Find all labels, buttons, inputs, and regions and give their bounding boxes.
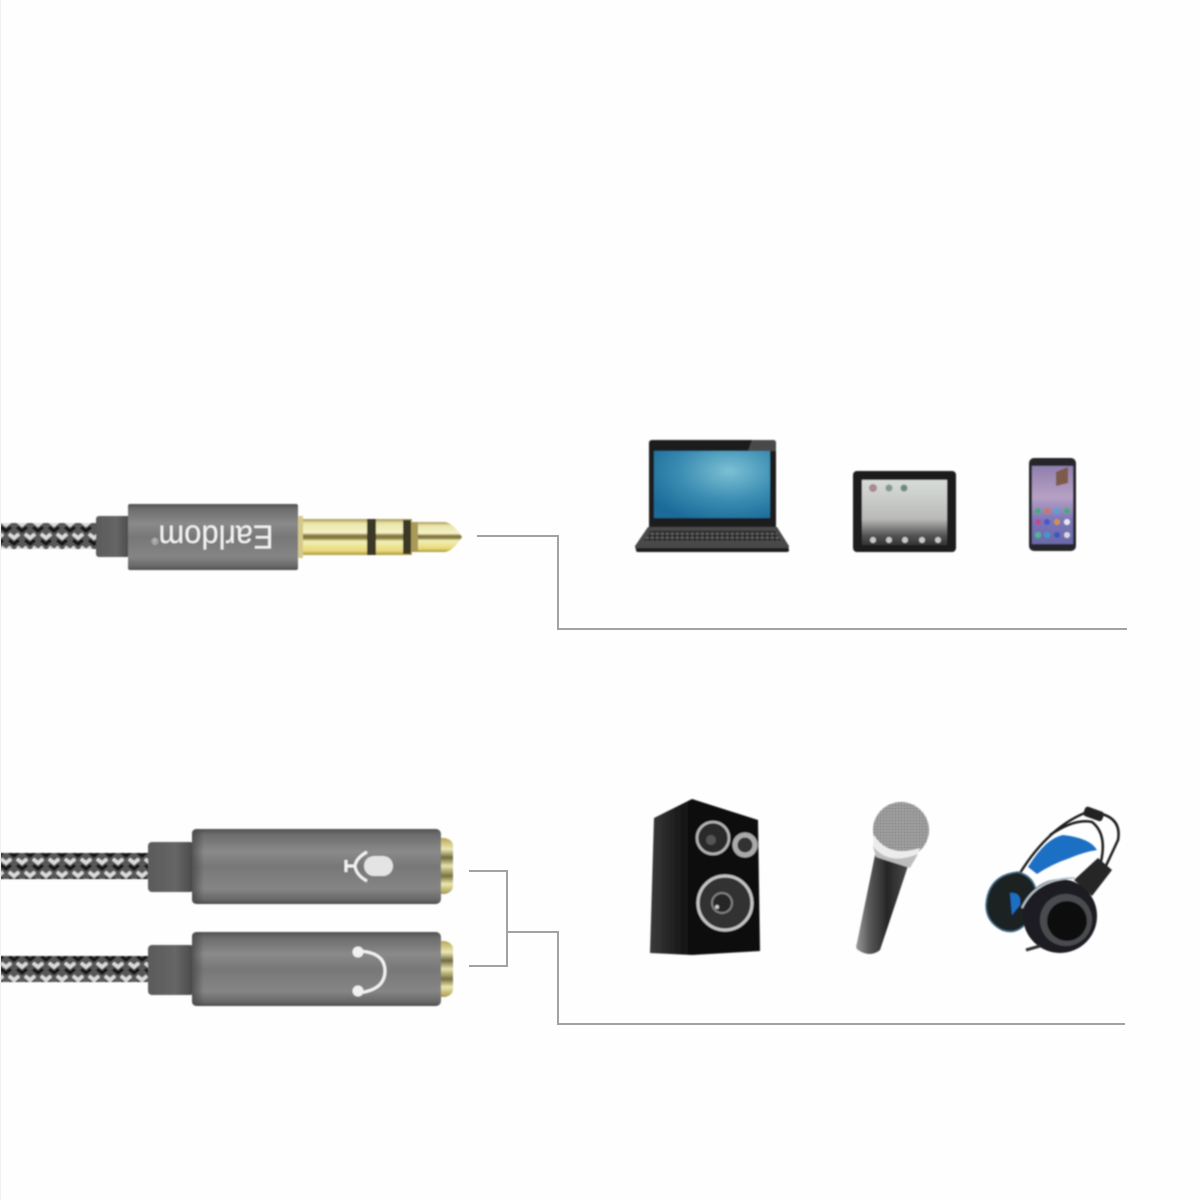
left edge line [0,0,1,1200]
cable [1026,946,1040,950]
braided cord [0,523,96,549]
strain relief collar [148,945,194,995]
metal housing [192,829,441,904]
connector bracket: sockets to devices [469,871,1125,1024]
icon: headset [986,806,1119,953]
icon: microphone [856,802,929,954]
icon: tablet [853,471,956,552]
gold socket ring [440,838,453,894]
grille head [873,802,929,858]
collar ring [873,835,920,858]
icon: laptop [635,440,789,552]
metal housing [192,932,441,1006]
connector line: plug to devices [477,536,1127,629]
near ear cup [1023,879,1097,953]
icon: smartphone [1029,458,1076,551]
icon: headphone symbol [352,946,385,996]
cable: microphone socket [0,829,453,904]
midrange driver [697,822,729,854]
brand logo: Earldom [158,518,274,555]
tweeter [735,835,755,855]
strain relief collar [148,842,194,892]
gold socket ring [440,941,453,997]
arm [1074,858,1112,896]
registered mark: ® [152,536,159,546]
braided cord [0,853,148,879]
strain relief collar [96,516,130,557]
braided cord [0,956,148,982]
gold connector [298,516,462,558]
icon: microphone symbol [346,852,393,881]
far ear cup [986,872,1037,932]
cable: headphone socket [0,932,453,1006]
icon: speaker [650,799,760,955]
woofer [698,876,752,930]
headband [1020,811,1119,873]
metal housing with logo [128,504,298,570]
blue pad [1028,835,1097,874]
cable: 3.5mm plug [0,504,462,570]
handle [856,855,908,954]
